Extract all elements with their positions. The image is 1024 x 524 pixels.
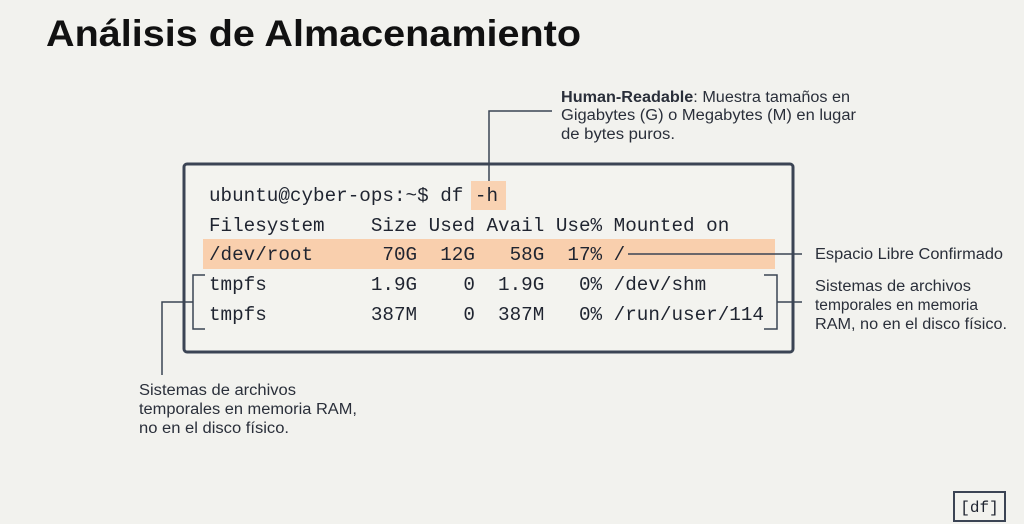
bracket: left: [162, 275, 205, 375]
callout: human-readable: de bytes puros.: [561, 126, 675, 143]
highlight: -h flag: [471, 181, 506, 210]
callout: free space: Espacio Libre Confirmado: [815, 246, 1003, 263]
callout: human-readable: [561, 89, 856, 143]
terminal row: tmpfs run: tmpfs 387M 0 387M 0% /run/user/114: [209, 304, 764, 326]
terminal prompt line: ubuntu@cyber-ops:~$ df -h: [209, 185, 498, 207]
bracket: right: [764, 275, 802, 329]
callout: tmpfs left: temporales en memoria RAM,: [139, 401, 357, 418]
highlight: /dev/root row: [203, 239, 775, 269]
callout: tmpfs right: temporales en memoria: [815, 297, 978, 314]
arrow: free space leader: [628, 253, 802, 255]
callout: tmpfs right: [815, 278, 1007, 333]
callout: tmpfs left: Sistemas de archivos: [139, 382, 296, 399]
callout: human-readable: Human-Readable : Muestra tamaños en: [561, 89, 850, 106]
title: Análisis de Almacenamiento: [46, 13, 581, 54]
badge: df: [954, 492, 1005, 521]
panel: terminal: [184, 164, 793, 352]
callout: tmpfs left: [139, 382, 357, 437]
terminal row: tmpfs shm: tmpfs 1.9G 0 1.9G 0% /dev/shm: [209, 274, 706, 296]
badge: df: [df]: [960, 499, 999, 517]
callout: human-readable: Gigabytes (G) o Megabytes (M) en lugar: [561, 107, 856, 124]
callout: tmpfs right: RAM, no en el disco físico.: [815, 316, 1007, 333]
terminal row: /dev/root: /dev/root 70G 12G 58G 17% /: [209, 244, 625, 266]
callout: tmpfs right: Sistemas de archivos: [815, 278, 971, 295]
arrow: human-readable leader: [489, 111, 552, 181]
terminal header row: Filesystem Size Used Avail Use% Mounted on: [209, 215, 729, 237]
callout: tmpfs left: no en el disco físico.: [139, 420, 289, 437]
